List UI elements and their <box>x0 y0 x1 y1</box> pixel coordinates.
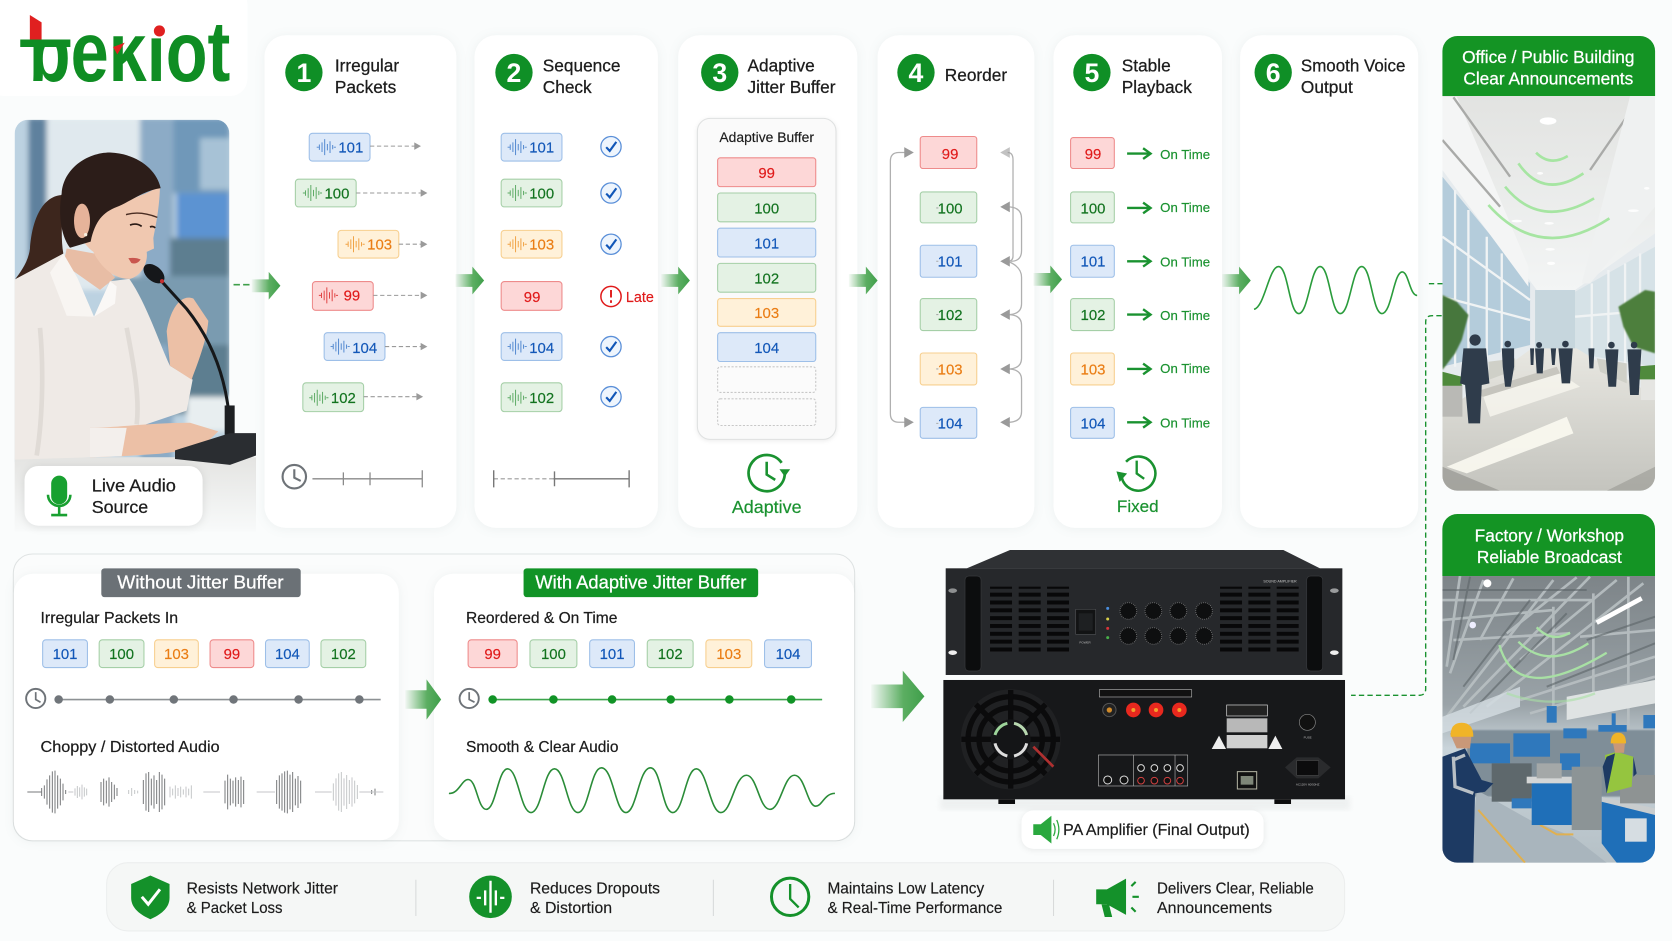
smooth waveform <box>1254 267 1417 314</box>
row 102: 102 <box>529 390 554 407</box>
adaptive buffer stack: 104 <box>754 340 779 357</box>
arrow: step 1 to 2 <box>455 267 484 294</box>
icon: speaker <box>1033 816 1059 843</box>
playback rows: On Time <box>1160 147 1210 162</box>
benefit: resists network jitter <box>131 875 338 919</box>
reordered packets: 104 <box>938 416 963 433</box>
playback rows: On Time <box>1160 255 1210 270</box>
benefit: resists network jitter: Resists Network Jitter <box>187 881 338 898</box>
panel: step 4 reorder <box>878 35 1034 528</box>
row 101 <box>501 133 621 161</box>
packet row irregular: 99 <box>224 646 240 663</box>
adaptive buffer stack: Adaptive Buffer <box>719 129 814 145</box>
benefit: maintains low latency <box>771 878 1002 917</box>
packet row irregular: 103 <box>164 646 189 663</box>
row 101: 101 <box>529 140 554 157</box>
packet 100: 100 <box>325 185 349 202</box>
panel: comparison frame <box>13 554 855 841</box>
panel: step 3 adaptive jitter buffer <box>678 35 857 528</box>
playback rows: On Time <box>1160 416 1210 431</box>
logo: bekiot: bekiot <box>29 5 230 100</box>
connector: output to venues <box>1351 284 1443 695</box>
reordered packets: 101 <box>938 254 963 271</box>
smooth waveform <box>449 768 835 813</box>
playback rows: 103 <box>1081 361 1105 378</box>
arrow: step 2 to 3 <box>661 267 690 294</box>
panel: step 1 irregular packets <box>264 35 456 528</box>
benefit: delivers clear announcements: Delivers Clear, Reliable <box>1157 881 1314 898</box>
playback rows: 99 <box>1085 146 1101 163</box>
benefit: delivers clear announcements: Announcements <box>1157 900 1272 917</box>
timeline uneven <box>26 689 381 708</box>
packet 104: 104 <box>352 340 377 357</box>
label: live audio source: Source <box>92 497 148 517</box>
panel: step 6 smooth voice output: Output <box>1301 77 1353 97</box>
panel: factory workshop: Factory / Workshop <box>1475 526 1624 546</box>
panel: office public building: Clear Announcements <box>1463 68 1634 88</box>
reordered packets: 102 <box>938 307 963 324</box>
heading: reorder: Reorder <box>945 65 1007 85</box>
icon: fixed clock <box>1116 457 1155 491</box>
panel: with adaptive jitter buffer <box>434 568 854 840</box>
heading: adaptive jitter buffer: Jitter Buffer <box>747 77 836 97</box>
panel: factory workshop <box>1442 514 1655 863</box>
playback rows: 104 <box>1081 416 1105 433</box>
arrow: to amplifier <box>871 671 924 722</box>
packet 99: 99 <box>344 288 360 305</box>
PA amplifier <box>940 550 1350 849</box>
panel: factory workshop: Reliable Broadcast <box>1477 547 1622 567</box>
icon: microphone <box>48 476 70 515</box>
panel: without jitter buffer <box>14 568 399 840</box>
tag: without jitter buffer: Without Jitter Buffer <box>117 573 284 593</box>
badge 6: 6 <box>1266 58 1281 88</box>
row 99 late <box>501 282 654 310</box>
packet row irregular: 104 <box>275 646 300 663</box>
badge 5: 5 <box>1085 58 1100 88</box>
playback rows <box>1071 138 1210 438</box>
photo: live audio source speaker <box>10 117 256 531</box>
row 100 <box>501 179 621 207</box>
arrow: without to with <box>405 679 441 720</box>
playback rows: On Time <box>1160 200 1210 215</box>
heading: stable playback: Stable <box>1122 55 1171 75</box>
badge 5 <box>1073 54 1111 91</box>
table fade <box>15 457 256 531</box>
packet 99 <box>312 282 427 310</box>
panel: office public building <box>1442 36 1657 493</box>
badge 3: 3 <box>712 58 727 88</box>
heading: smooth voice output: Smooth Voice <box>1301 55 1405 75</box>
row 104 <box>501 333 621 360</box>
arrow: step 5 to 6 <box>1222 267 1251 294</box>
badge 4 <box>897 54 935 91</box>
badge 3 <box>701 54 738 91</box>
arrow: source to step 1 <box>234 272 280 300</box>
people <box>1460 334 1641 423</box>
playback rows: 100 <box>1081 200 1105 217</box>
packet row reordered <box>468 640 811 668</box>
packet row irregular: 101 <box>53 646 77 663</box>
arrow: step 3 to 4 <box>849 267 878 294</box>
heading: irregular packets in: Irregular Packets In <box>41 610 178 627</box>
panel: benefits bar <box>107 863 1345 931</box>
icon: adaptive clock <box>749 455 790 491</box>
heading: choppy distorted audio: Choppy / Distorted Audio <box>41 739 220 756</box>
timeline <box>494 470 629 487</box>
label: live audio source: Live Audio <box>92 476 176 496</box>
benefit: delivers clear announcements <box>1096 879 1314 917</box>
adaptive buffer stack: 102 <box>754 271 779 288</box>
playback rows: 102 <box>1081 307 1105 324</box>
badge 4: 4 <box>909 58 924 88</box>
row 102 <box>501 383 621 412</box>
playback rows: On Time <box>1160 308 1210 323</box>
adaptive buffer stack: 99 <box>758 165 775 182</box>
arrow: step 4 to 5 <box>1033 266 1062 293</box>
heading: sequence check: Sequence <box>543 55 621 75</box>
benefit: resists network jitter: & Packet Loss <box>187 900 283 917</box>
packet 103 <box>338 230 427 258</box>
row 103: 103 <box>529 237 554 254</box>
row 99 late: Late <box>626 290 654 306</box>
PA amplifier: SOUND AMPLIFIER <box>1263 579 1297 583</box>
packet 100 <box>295 179 427 207</box>
choppy waveform <box>27 771 383 813</box>
heading: irregular packets: Irregular <box>335 55 399 75</box>
packet row reordered: 102 <box>658 646 683 663</box>
panel: step 6 smooth voice output <box>1240 35 1418 528</box>
packet row reordered: 101 <box>600 646 625 663</box>
tag: without jitter buffer <box>101 568 301 597</box>
label: PA amplifier final output: PA Amplifier (Final Output) <box>1063 822 1250 839</box>
packet row reordered: 103 <box>716 646 741 663</box>
reordered packets <box>920 137 977 438</box>
packet 102: 102 <box>331 390 356 407</box>
packet row reordered: 99 <box>484 646 501 663</box>
adaptive buffer stack: 100 <box>754 200 779 217</box>
panel: step 5 stable playback <box>1054 35 1222 528</box>
worker left <box>1442 748 1493 863</box>
benefit: reduces dropouts: Reduces Dropouts <box>530 881 660 898</box>
label: adaptive: Adaptive <box>732 497 802 517</box>
packet 101: 101 <box>338 140 363 157</box>
machines <box>1467 730 1655 797</box>
reordered packets: 99 <box>942 146 958 163</box>
packet 104 <box>324 333 427 360</box>
packet row reordered: 100 <box>541 646 566 663</box>
benefit: reduces dropouts <box>469 875 660 918</box>
playback rows: On Time <box>1160 361 1210 376</box>
heading: irregular packets: Packets <box>335 77 397 97</box>
worker right <box>1605 752 1633 793</box>
packet row irregular <box>43 640 366 668</box>
reorder connector lines <box>890 147 1022 428</box>
panel: step 2 sequence check <box>475 35 658 528</box>
badge 1: 1 <box>296 58 311 88</box>
reordered packets: 103 <box>938 361 963 378</box>
benefit: maintains low latency: & Real-Time Performance <box>827 900 1002 917</box>
timeline even <box>460 689 822 708</box>
packet row reordered: 104 <box>776 646 800 663</box>
adaptive buffer stack <box>697 118 836 439</box>
benefit: maintains low latency: Maintains Low Latency <box>827 881 985 898</box>
label: live audio source <box>25 466 203 526</box>
packet 102 <box>303 383 423 412</box>
packet row irregular: 102 <box>331 646 356 663</box>
heading: adaptive jitter buffer: Adaptive <box>747 55 815 75</box>
timeline with clock <box>283 465 422 488</box>
heading: reordered on time: Reordered & On Time <box>466 610 617 627</box>
PA amplifier: POWER <box>1079 640 1092 644</box>
label: PA amplifier final output <box>1022 810 1264 849</box>
badge 2: 2 <box>507 58 521 88</box>
tag: with adaptive jitter buffer <box>524 568 758 597</box>
row 103 <box>501 230 621 258</box>
panel: office public building: Office / Public Building <box>1462 47 1635 67</box>
adaptive buffer stack: 103 <box>754 305 779 322</box>
heading: sequence check: Check <box>543 77 592 97</box>
playback rows: 101 <box>1081 254 1105 271</box>
badge 6 <box>1255 54 1292 91</box>
row 99 late: 99 <box>524 289 540 306</box>
heading: stable playback: Playback <box>1122 77 1192 97</box>
packet 101 <box>309 133 421 161</box>
adaptive buffer stack: 101 <box>754 235 779 252</box>
row 100: 100 <box>529 185 554 202</box>
PA amplifier: AC120V 60/50HZ <box>1296 782 1320 786</box>
packet row irregular: 100 <box>109 646 134 663</box>
badge 2 <box>495 54 533 91</box>
heading: smooth clear audio: Smooth & Clear Audio <box>466 739 618 756</box>
benefit: reduces dropouts: & Distortion <box>530 900 612 917</box>
badge 1 <box>285 54 323 91</box>
packet 103: 103 <box>367 237 392 254</box>
PA amplifier: FUSE <box>1304 736 1312 740</box>
tag: with adaptive jitter buffer: With Adaptive Jitter Buffer <box>535 573 746 593</box>
row 104: 104 <box>529 340 554 357</box>
reordered packets: 100 <box>938 200 963 217</box>
label: fixed: Fixed <box>1117 497 1159 516</box>
